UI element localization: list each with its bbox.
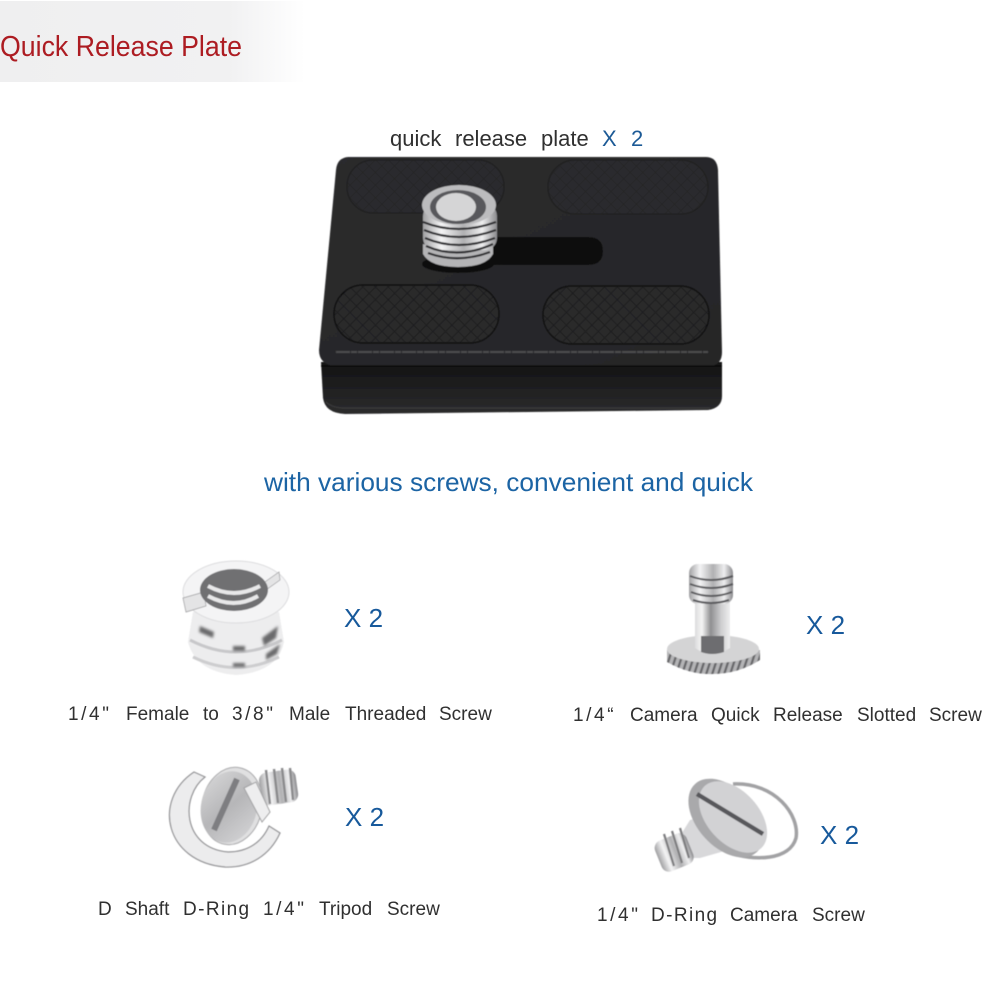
multiplier: X 2 (344, 603, 383, 633)
label: 3/8" (232, 704, 276, 725)
label: 1/4" (68, 704, 112, 725)
header band (0, 1, 305, 82)
label: D (98, 899, 112, 920)
label: Quick (711, 705, 760, 726)
label: Camera (730, 905, 798, 926)
plate caption: X (602, 126, 617, 151)
plate top face (319, 157, 722, 366)
label: Shaft (125, 899, 170, 920)
plate caption: release (455, 126, 527, 151)
multiplier: X 2 (806, 610, 845, 640)
label: Threaded (345, 704, 426, 725)
label: Tripod (319, 899, 372, 920)
label: 1/4" (597, 905, 641, 926)
grip pad bottom left (334, 285, 499, 343)
icon: slotted screw (667, 564, 760, 674)
label: Slotted (857, 705, 916, 726)
multiplier: X 2 (820, 820, 859, 850)
item: threaded adapter (68, 561, 492, 725)
plate caption: quick (390, 126, 442, 151)
item: D shaft screw (98, 762, 440, 920)
plate caption: 2 (631, 126, 643, 151)
label: Release (773, 705, 843, 726)
item: D-ring camera screw (597, 764, 865, 926)
label: Male (289, 704, 330, 725)
mounting screw (422, 185, 497, 273)
item: slotted screw (573, 564, 982, 726)
multiplier: X 2 (345, 802, 384, 832)
label: to (203, 704, 219, 725)
label: Female (126, 704, 189, 725)
quick release plate photo (319, 157, 722, 414)
grip pad bottom right (543, 286, 709, 344)
plate caption: plate (541, 126, 589, 151)
grip pad top right (548, 160, 708, 214)
label: D-Ring (183, 899, 251, 920)
icon: threaded adapter (183, 561, 289, 675)
label: Camera (630, 705, 698, 726)
label: D-Ring (651, 905, 719, 926)
label: Screw (439, 704, 492, 725)
label: Screw (387, 899, 440, 920)
subtitle: with various screws, convenient and quick (263, 467, 754, 497)
grip pad top left (347, 160, 504, 213)
title: Quick Release Plate (0, 31, 242, 63)
icon: D-ring tripod screw (169, 762, 299, 867)
label: 1/4“ (573, 705, 616, 726)
icon: D-ring camera screw (652, 764, 796, 874)
label: Screw (929, 705, 982, 726)
label: 1/4" (263, 899, 307, 920)
plate front edge (321, 362, 722, 414)
mounting slot (490, 237, 603, 265)
label: Screw (812, 905, 865, 926)
